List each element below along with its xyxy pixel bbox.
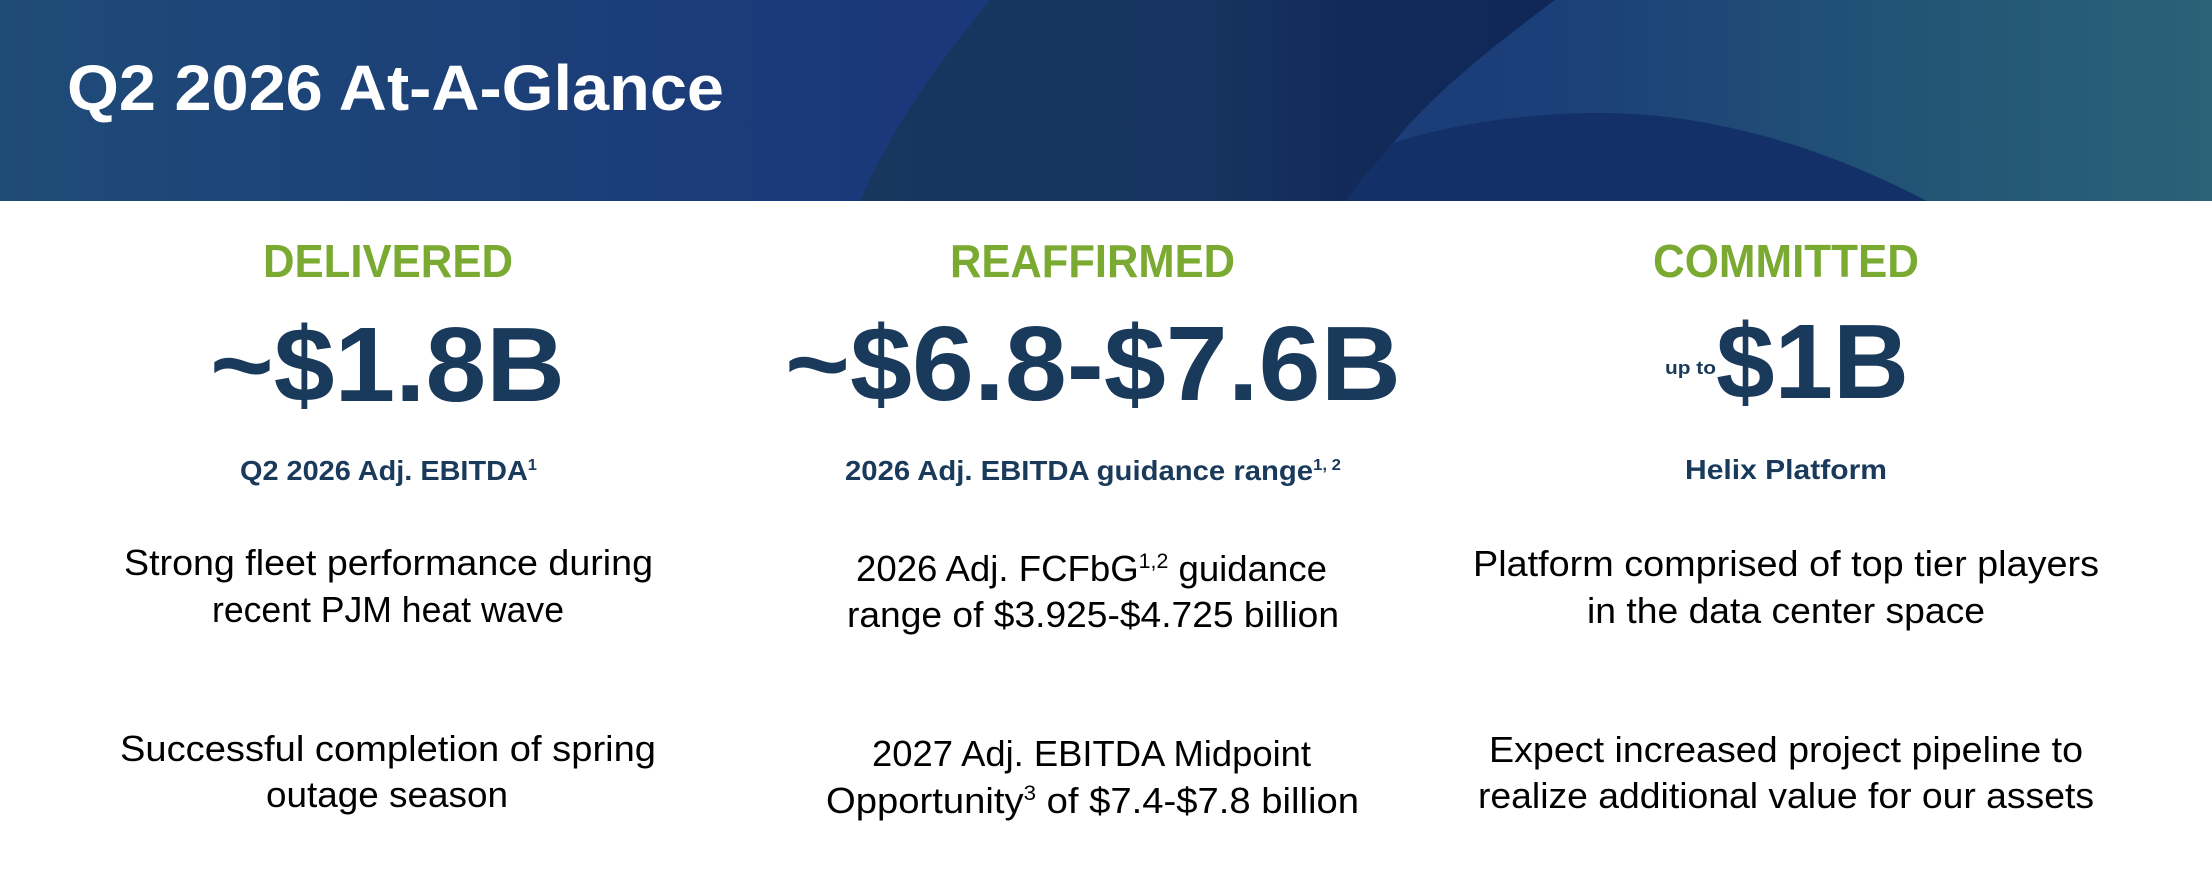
text: fleet performance: Strong fleet performance during [124, 542, 653, 583]
title: Q2 2026 At-A-Glance [67, 52, 724, 124]
text: FCFbG guidance: guidance [1168, 548, 1327, 589]
metric: ~$1.8B: ~$1.8B [210, 306, 565, 424]
heading: committed: COMMITTED [1653, 235, 1919, 287]
text: data center: in the data center space [1587, 590, 1985, 631]
column: reaffirmed [785, 235, 1401, 821]
text: project pipeline: Expect increased project pipeline to [1489, 729, 2083, 770]
text: additional value: realize additional value for our assets [1478, 775, 2094, 816]
text: spring outage: Successful completion of spring [120, 728, 656, 769]
metric: $1B: $1B [1716, 303, 1909, 421]
text: opportunity: Opportunity [826, 780, 1012, 821]
metric label: guidance range: 1, 2 [1313, 457, 1341, 474]
metric label: guidance range: 2026 Adj. EBITDA guidance range [845, 455, 1293, 486]
metric label: Q2 Adj. EBITDA: Q2 2026 Adj. EBITDA [240, 455, 519, 486]
text: FCFbG guidance: 1,2 [1139, 550, 1168, 573]
heading: reaffirmed: REAFFIRMED [950, 235, 1235, 287]
text: opportunity: 3 [1024, 782, 1036, 805]
column: delivered [120, 235, 656, 815]
dark curved band [860, 0, 1555, 201]
heading: delivered: DELIVERED [263, 235, 513, 287]
text: heat wave: recent PJM heat wave [212, 589, 564, 630]
header banner [0, 0, 2212, 201]
metric: ~$6.8-$7.6B: ~$6.8-$7.6B [785, 305, 1401, 423]
hill shape [1346, 113, 1927, 201]
metric label: Q2 Adj. EBITDA: 1 [528, 457, 537, 474]
text: opportunity: of $7.4-$7.8 billion [1036, 780, 1359, 821]
text: FCFbG guidance: 2026 Adj. FCFbG [856, 548, 1134, 589]
text: outage season: outage season [266, 774, 508, 815]
metric prefix: up to: up to [1665, 358, 1716, 378]
text: platform players: Platform comprised of top tier players [1473, 543, 2099, 584]
text: 2027 midpoint: 2027 Adj. EBITDA Midpoint [872, 733, 1311, 774]
column: committed [1473, 235, 2099, 816]
text: FCFbG range: range of $3.925-$4.725 billion [847, 594, 1339, 635]
metric label: Helix Platform: Helix Platform [1685, 454, 1887, 485]
